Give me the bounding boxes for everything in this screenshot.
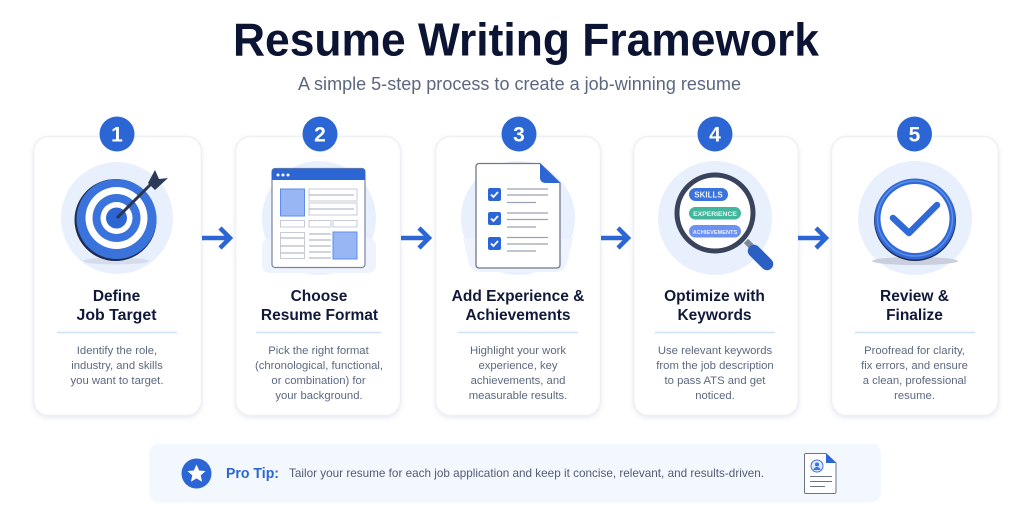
step number 4: [698, 116, 732, 152]
step number 3: [502, 116, 536, 152]
icon: check mark badge: [858, 161, 972, 275]
arrow 4 to 5: [798, 228, 826, 248]
pro tip label: Pro Tip:: [226, 466, 279, 482]
step number 5: 5: [909, 124, 921, 146]
step heading: [76, 288, 156, 324]
step heading: Define: [93, 288, 141, 305]
step description: to pass ATS and get: [665, 375, 766, 387]
panel: pro tip: [149, 444, 881, 502]
icon: magnifying glass with keywords: EXPERIENCE: [693, 211, 737, 218]
step description: noticed.: [695, 390, 735, 402]
step description: Use relevant keywords: [658, 345, 772, 357]
step description: fix errors, and ensure: [861, 360, 968, 372]
step heading: Achievements: [465, 307, 571, 324]
step description: achievements, and: [471, 375, 565, 387]
step description: (chronological, functional,: [255, 360, 383, 372]
pro tip text: Tailor your resume for each job application and keep it concise, relevant, and results-driven.: [289, 466, 764, 480]
step heading: [452, 288, 584, 324]
step number 4: 4: [709, 124, 721, 146]
step heading: Add Experience &: [452, 288, 584, 305]
arrow 3 to 4: [601, 228, 628, 248]
step description: from the job description: [656, 360, 774, 372]
step description: industry, and skills: [71, 360, 163, 372]
panel: step 4 optimize with keywords: [634, 116, 798, 416]
panel: step 5 review and finalize: [832, 116, 998, 416]
step number 1: [100, 116, 134, 152]
step heading: Keywords: [677, 307, 752, 324]
icon: magnifying glass with keywords: SKILLS: [694, 190, 723, 200]
icon: target with arrow: [61, 162, 173, 274]
subtitle: A simple 5-step process to create a job-winning resume: [298, 73, 741, 94]
step description: you want to target.: [71, 375, 163, 387]
icon: resume layout window: [262, 161, 376, 275]
step heading: Resume Format: [261, 307, 378, 324]
step heading: [261, 288, 378, 324]
panel: step 3 add experience and achievements: [436, 116, 600, 416]
step heading: Choose: [291, 288, 348, 305]
step heading: Finalize: [886, 307, 943, 324]
step description: [469, 345, 567, 402]
step heading: Review &: [880, 288, 949, 305]
step description: or combination) for: [271, 375, 366, 387]
panel: step 2 choose resume format: [236, 116, 400, 416]
step description: Proofread for clarity,: [864, 345, 965, 357]
step number 2: 2: [314, 124, 326, 146]
arrow 1 to 2: [202, 228, 230, 248]
step description: a clean, professional: [863, 375, 966, 387]
icon: magnifying glass with keywords: ACHIEVEMENTS: [693, 230, 737, 236]
icon: star badge: [182, 458, 212, 488]
step number 3: 3: [513, 124, 525, 146]
step number 2: [302, 116, 338, 152]
step number 1: 1: [111, 124, 123, 146]
step description: [71, 345, 163, 387]
step description: [255, 345, 383, 402]
step description: Pick the right format: [268, 345, 370, 357]
step description: measurable results.: [469, 390, 567, 402]
step heading: Optimize with: [664, 288, 765, 305]
icon: checklist document: [461, 161, 575, 275]
icon: magnifying glass with keywords: [658, 161, 772, 275]
title: Resume Writing Framework: [233, 14, 819, 66]
step heading: [880, 288, 949, 324]
step description: [861, 345, 968, 402]
step description: your background.: [275, 390, 363, 402]
arrow 2 to 3: [401, 228, 429, 248]
step heading: [664, 288, 765, 324]
step number 5: [897, 116, 932, 152]
step heading: Job Target: [76, 307, 156, 324]
icon: resume document: [804, 454, 836, 494]
step description: Highlight your work: [470, 345, 566, 357]
step description: Identify the role,: [77, 345, 157, 357]
step description: resume.: [894, 390, 935, 402]
step description: experience, key: [478, 360, 558, 372]
panel: step 1 define job target: [34, 116, 202, 416]
step description: [656, 345, 774, 402]
